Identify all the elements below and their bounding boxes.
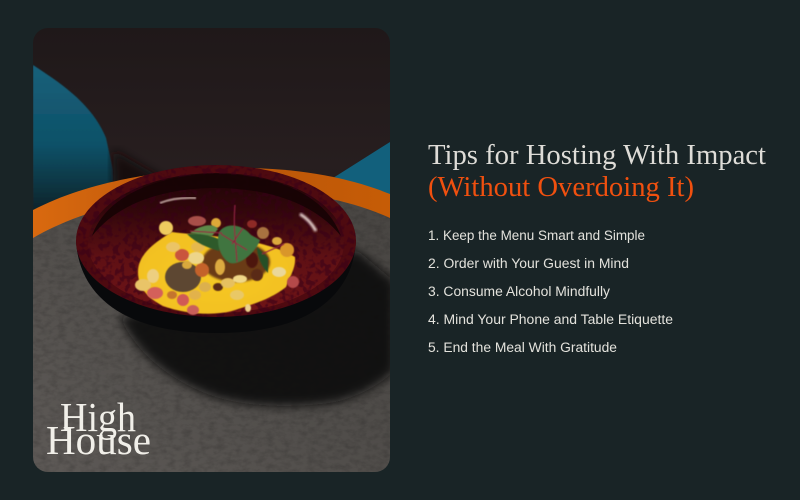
logo word House: House [46, 417, 151, 463]
icon: herb garnish [187, 205, 284, 273]
floor backdrop [33, 28, 390, 177]
table stone top [33, 190, 390, 472]
tip 3: 3. Consume Alcohol Mindfully [428, 284, 610, 299]
heading line 2: (Without Overdoing It) [428, 172, 694, 203]
seared centrepiece [165, 262, 201, 292]
logo: High House [47, 402, 150, 454]
icon: teal chair left [33, 64, 114, 210]
tip 4: 4. Mind Your Phone and Table Etiquette [428, 312, 673, 327]
bowl rim [76, 165, 356, 317]
tip 1: 1. Keep the Menu Smart and Simple [428, 228, 645, 243]
heading [428, 140, 766, 203]
bowl shadow [120, 250, 395, 406]
bowl inner [88, 173, 344, 313]
bowl underside [76, 240, 356, 333]
heading line 1: Tips for Hosting With Impact [428, 140, 766, 171]
photo: plated dish on a restaurant table [33, 28, 395, 472]
logo word High: High [60, 394, 136, 440]
dark food centre [202, 242, 270, 282]
corn kernels and pork cubes [135, 216, 299, 315]
icon: teal chair right [334, 142, 390, 194]
bowl with food [76, 165, 356, 333]
highlights [160, 198, 196, 203]
stone texture [33, 190, 390, 472]
bowl upper shade [92, 174, 341, 236]
tips list [428, 228, 673, 355]
chair floor shadow [108, 150, 157, 182]
tip 5: 5. End the Meal With Gratitude [428, 340, 617, 355]
table wood edge [33, 168, 390, 238]
polenta puree [138, 232, 295, 314]
tip 2: 2. Order with Your Guest in Mind [428, 256, 629, 271]
